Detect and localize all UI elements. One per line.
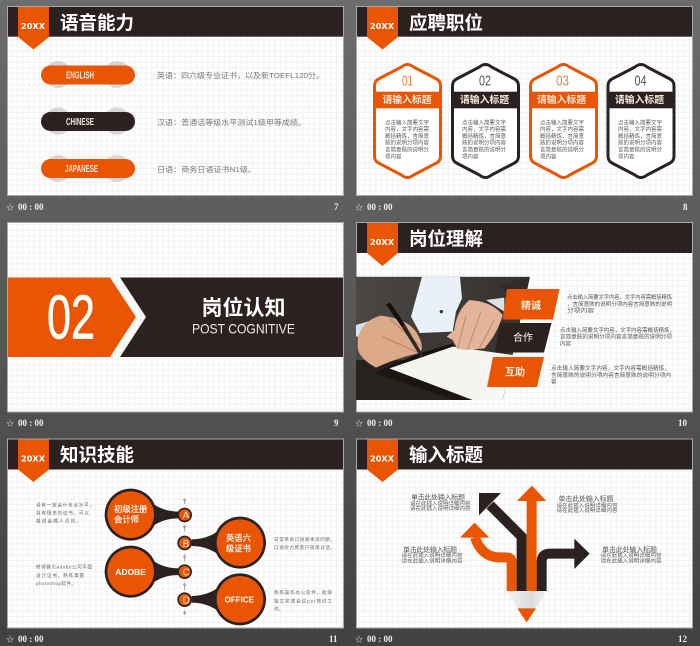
text: top left: 请在此插入说明详细内容	[410, 500, 470, 507]
tag: 互助	[487, 357, 544, 387]
dark band	[120, 278, 343, 357]
card 02	[452, 64, 519, 178]
bubble C: ADOBE	[115, 567, 146, 577]
text: accountant: 报送金蝶人员的。	[36, 517, 81, 524]
card 01: 言简意赅的说明分	[385, 146, 430, 154]
text: accountant: 具有一定会计专业水平，	[36, 502, 94, 508]
card 04: 赅的说明分项内容	[618, 139, 663, 147]
text: CET-6: 口语听力原客户简单对话。	[274, 544, 335, 551]
pill: Chinese	[41, 108, 135, 134]
card 01: 赅的说明分项内容	[385, 139, 430, 147]
arrow: orange up	[517, 486, 546, 591]
text: 精诚: 点击输入简要文字内容，文字内容需概括精炼	[567, 293, 672, 301]
year tag	[18, 440, 49, 482]
footer: slide 9: 9	[334, 418, 339, 428]
text: office: 作。	[274, 606, 283, 612]
card 02: 概括精炼，言简意	[462, 132, 507, 140]
card 03: 内容，文字内容需	[540, 125, 585, 133]
footer: slide 7: ☆	[6, 203, 14, 212]
text: 合作: 点击输入简要文字内容，文字内容需概括精炼，	[560, 326, 675, 334]
card 02: 点击输入简要文字	[462, 118, 507, 126]
card 04	[608, 64, 674, 178]
header bar	[357, 223, 692, 253]
text: 精诚: 分项内容	[567, 306, 595, 314]
text: lower left	[402, 545, 462, 564]
panel: slide 7 language ability	[8, 6, 344, 196]
card 01: 点击输入简要文字	[385, 118, 430, 126]
bubble B	[177, 517, 266, 569]
text: 精诚: ，言简意赅的说明分项内容言简意赅的说明	[567, 300, 672, 308]
bubble A	[105, 489, 192, 541]
text: lower right: 请在此插入说明详细内容	[600, 552, 662, 559]
year tag	[367, 223, 398, 266]
tag: 合作	[495, 323, 552, 352]
footer: slide 12: ☆	[355, 635, 363, 644]
text: Chinese: 汉语：普通话等级水平测试1级甲等成绩。	[157, 118, 306, 127]
footer: slide 12	[355, 634, 688, 644]
year tag: 20XX	[21, 454, 45, 464]
panel: slide 10 job understanding	[356, 222, 692, 412]
text: adobe: 获得赛贝adobe公司平面	[36, 564, 92, 570]
text: 互助: 点击输入简要文字内容，文字内容需概括精炼，	[551, 364, 670, 372]
footer: slide 10: ☆	[355, 419, 363, 428]
card 04: 请输入标题	[615, 93, 664, 106]
text: top left: 请在此插入说明详细内容	[410, 505, 470, 512]
section subtitle: POST COGNITIVE	[192, 320, 295, 336]
title: 岗位理解	[409, 228, 483, 250]
card 01	[374, 64, 441, 178]
text: top right: 请在此插入说明详细内容	[556, 502, 618, 509]
photo: hands signing document	[356, 277, 531, 400]
bubble B: 英语六	[226, 533, 251, 543]
year tag	[18, 7, 49, 50]
card 04: 言简意赅的说明分	[618, 146, 663, 154]
pill: English	[41, 61, 135, 88]
pencil tip base	[507, 591, 547, 622]
section title: 岗位认知	[202, 296, 286, 320]
text: office: 熟练操作办公软件，能够	[274, 589, 332, 596]
text: adobe: photoshop软件。	[36, 580, 76, 587]
card 03: 请输入标题	[537, 93, 586, 106]
orange chevron band	[8, 278, 136, 357]
tag: 互助: 互助	[505, 366, 525, 378]
arrow: dark up left	[479, 493, 522, 591]
arrow: orange left curve	[460, 523, 512, 591]
footer: slide 7: 7	[334, 202, 339, 212]
card 04: 项内容	[618, 153, 635, 161]
card 04: 内容，文字内容需	[618, 125, 663, 133]
text: lower left: 请在此插入说明详细内容	[402, 552, 462, 559]
header bar	[357, 7, 692, 37]
arrow: dark right	[542, 539, 590, 591]
footer: slide 7: 00 : 00	[18, 202, 44, 212]
text: English: 英语：四六级专业证书，以及新TOEFL120分。	[157, 71, 324, 80]
text: 合作: 内容	[560, 340, 572, 348]
tag: 精诚: 精诚	[521, 299, 541, 312]
text: CET-6: 日常英语口语基本没问题，	[274, 536, 335, 543]
panel: slide 8 positions	[356, 6, 692, 196]
footer: slide 12: 12	[678, 634, 688, 644]
card 03: 概括精炼，言简意	[540, 132, 585, 140]
text: CET-6	[274, 536, 335, 551]
footer: slide 8: 8	[683, 202, 688, 212]
card 03: 点击输入简要文字	[540, 118, 585, 126]
header bar	[357, 440, 692, 470]
footer: slide 11: ☆	[6, 635, 14, 644]
footer: slide 10	[355, 418, 688, 428]
year tag: 20XX	[370, 454, 394, 464]
title: 应聘职位	[409, 12, 483, 34]
text: lower right: 请在此插入说明详细内容	[600, 558, 662, 564]
diagram: skill bubbles	[105, 489, 266, 625]
text: lower left: 请在此插入说明详细内容	[402, 558, 462, 564]
card 02: 项内容	[462, 153, 479, 161]
text: office	[274, 589, 332, 612]
text: lower right	[600, 545, 662, 564]
title: 语音能力	[60, 12, 134, 34]
card 02: 赅的说明分项内容	[462, 139, 507, 147]
footer: slide 11	[6, 634, 338, 644]
title: 输入标题	[409, 444, 484, 466]
tag: 合作: 合作	[513, 331, 533, 344]
card 03: 言简意赅的说明分	[540, 146, 585, 154]
text: adobe: 设计证书，熟练掌握	[36, 572, 84, 579]
title: 知识技能	[60, 444, 135, 466]
header bar	[8, 7, 343, 37]
bubble B: B	[183, 539, 190, 550]
card 01: 01	[402, 72, 413, 90]
card 04: 点击输入简要文字	[618, 118, 663, 126]
footer: slide 7	[6, 202, 339, 212]
pill: Japanese: JAPANESE	[65, 164, 98, 175]
tag: 精诚	[502, 289, 560, 320]
bubble A: A	[183, 511, 190, 522]
text: 合作	[560, 326, 675, 348]
bubble A: 初级注册	[114, 504, 147, 514]
text: accountant: 具有相关的证书，可以	[36, 509, 89, 516]
footer: slide 9: ☆	[6, 419, 14, 428]
card 03: 赅的说明分项内容	[540, 139, 585, 147]
pill: English: ENGLISH	[66, 70, 94, 82]
footer: slide 8: ☆	[355, 203, 363, 212]
header bar	[8, 440, 343, 470]
card 03: 03	[556, 72, 569, 90]
year tag	[367, 440, 398, 482]
footer: slide 11: 00 : 00	[18, 634, 44, 644]
card 02: 请输入标题	[460, 93, 509, 106]
text: top right	[556, 494, 618, 514]
section number: 02	[47, 284, 95, 352]
footer: slide 10: 00 : 00	[367, 418, 393, 428]
text: Japanese: 日语：商务日语证书N1级。	[157, 165, 256, 174]
text: 互助	[551, 364, 671, 386]
footer: slide 8: 00 : 00	[367, 202, 393, 212]
footer: slide 9: 00 : 00	[18, 418, 44, 428]
text: 精诚	[567, 293, 672, 314]
bubble D: D	[183, 595, 190, 606]
bubble C: C	[183, 567, 190, 578]
card 01: 请输入标题	[382, 93, 432, 106]
text: top left: 单击此处输入标题	[411, 492, 465, 502]
bubble D	[177, 573, 266, 625]
footer: slide 9	[6, 418, 339, 428]
bubble B: 级证书	[226, 543, 251, 553]
text: 互助: 容	[551, 378, 557, 386]
card 01: 内容，文字内容需	[385, 125, 430, 133]
bubble A: 会计师	[114, 514, 139, 524]
panel: slide 12 branching arrows	[356, 439, 692, 628]
text: lower left: 单击此处输入标题	[403, 545, 457, 554]
bubble C	[105, 546, 192, 598]
text: lower right: 单击此处输入标题	[602, 545, 657, 554]
footer: slide 11: 11	[329, 634, 338, 644]
footer: slide 12: 00 : 00	[367, 634, 393, 644]
year tag: 20XX	[370, 238, 394, 247]
year tag: 20XX	[21, 22, 45, 31]
year tag: 20XX	[370, 22, 394, 31]
text: 互助: 言简意赅的说明分项内容言简意赅的说明分项内	[551, 371, 671, 379]
year tag	[367, 7, 398, 50]
footer: slide 8	[355, 202, 688, 212]
footer: slide 10: 10	[678, 418, 688, 428]
card 03	[530, 64, 597, 178]
card 02: 内容，文字内容需	[462, 125, 507, 133]
diagram: arrows	[460, 486, 590, 622]
card 02: 言简意赅的说明分	[462, 146, 507, 154]
card 01: 概括精炼，言简意	[385, 132, 430, 140]
text: adobe	[36, 564, 92, 587]
panel: slide 9 section divider	[8, 222, 344, 412]
text: top right: 单击此处输入标题	[558, 494, 614, 503]
card 04: 概括精炼，言简意	[618, 132, 663, 140]
bubble D: OFFICE	[225, 594, 254, 604]
card 04: 04	[634, 72, 646, 90]
card 02: 02	[479, 72, 491, 90]
card 03: 项内容	[540, 153, 557, 161]
text: 合作: 言简意赅的说明分项内容言简意赅的说明分项	[560, 333, 672, 341]
pill: Japanese	[41, 155, 135, 182]
text: accountant	[36, 502, 94, 524]
text: office: 独立完成会议ppt培训工	[274, 598, 332, 604]
card 01: 项内容	[385, 153, 402, 161]
panel: slide 11 knowledge skills	[8, 439, 344, 628]
timeline marks	[183, 498, 186, 615]
text: top left	[410, 492, 470, 512]
text: top right: 请在此插入说明详细内容	[556, 507, 618, 514]
pill: Chinese: CHINESE	[66, 117, 94, 128]
